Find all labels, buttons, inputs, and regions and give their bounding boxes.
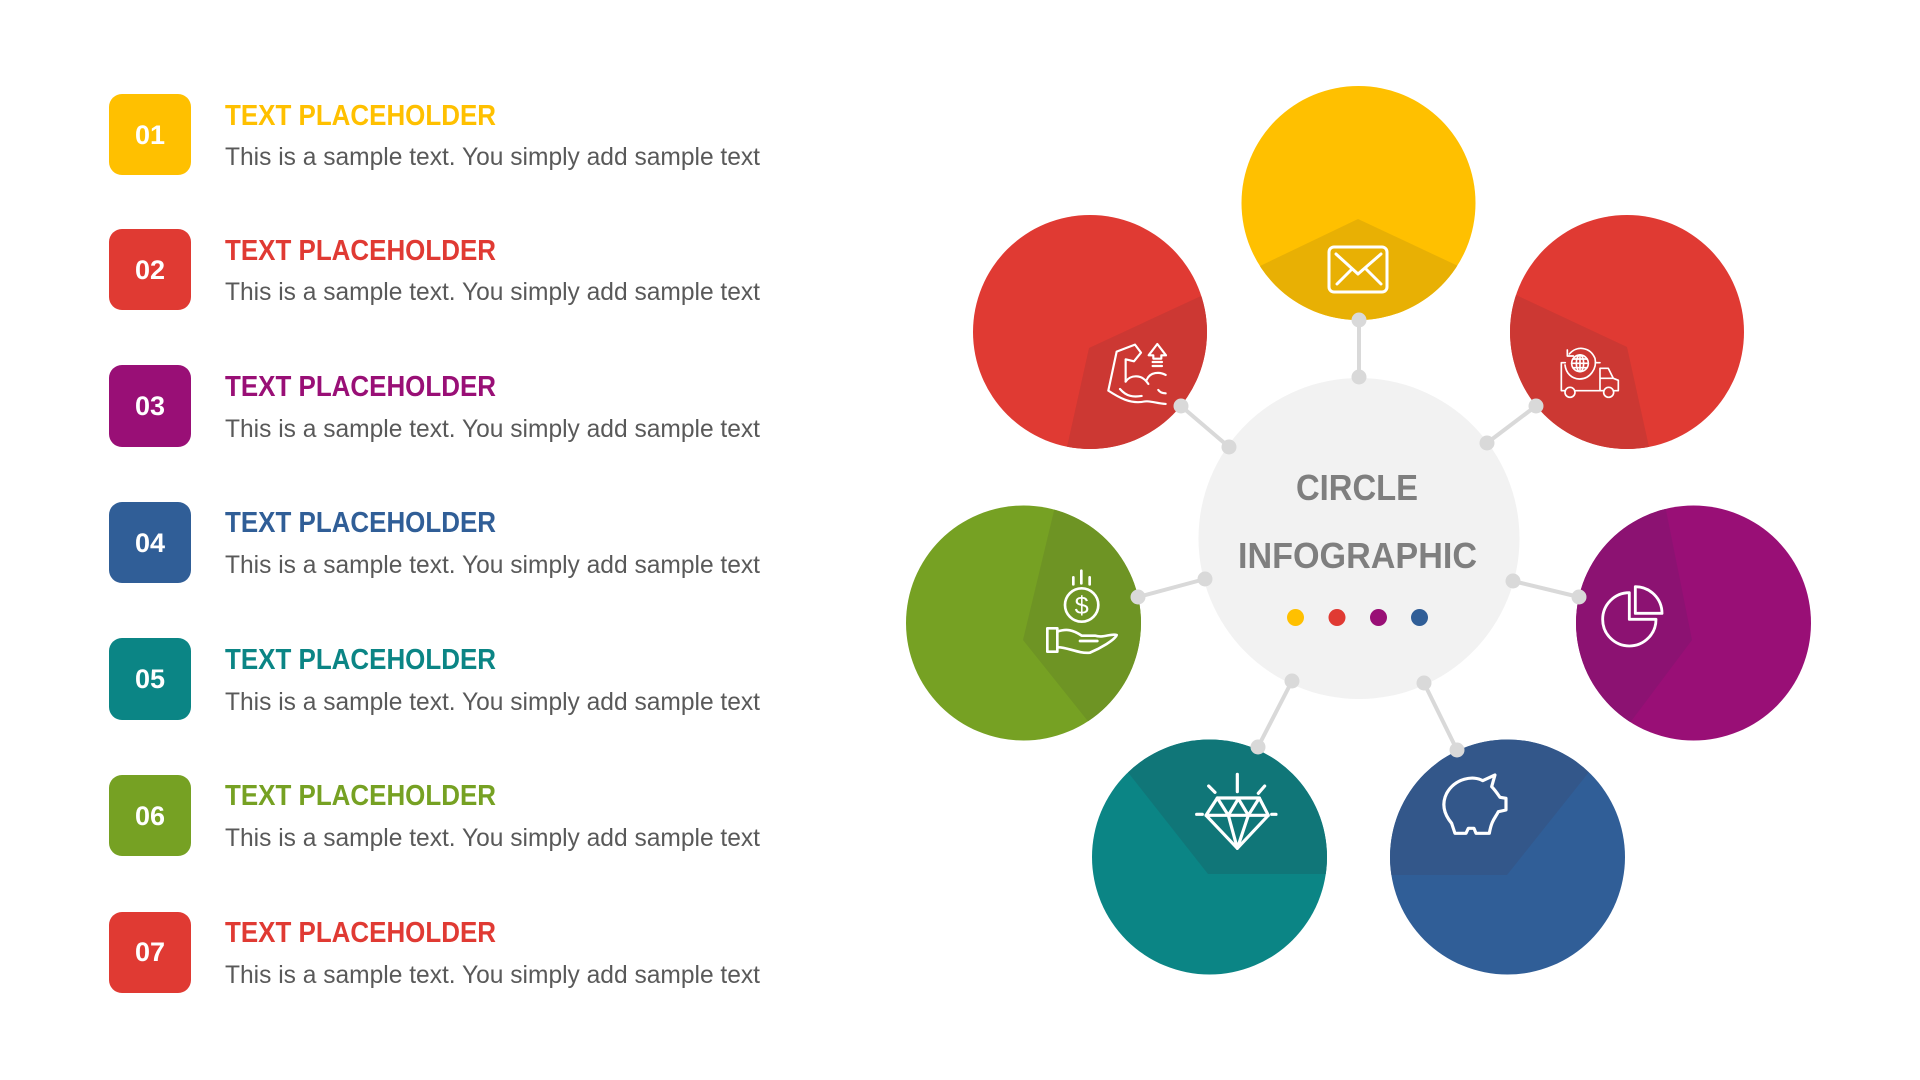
list item 03: 03 [135, 391, 165, 421]
title: INFOGRAPHIC [1238, 535, 1477, 576]
list item 06: This is a sample text. You simply add sample text [225, 824, 760, 852]
list item 05: TEXT PLACEHOLDER [225, 644, 496, 676]
list item 05: 05 [135, 664, 165, 694]
circle: purple with pie chart [1576, 506, 1811, 740]
list item 01 [109, 94, 760, 175]
list item 06: 06 [135, 801, 165, 831]
list item 05: This is a sample text. You simply add sample text [225, 688, 760, 716]
list item 06 [109, 775, 760, 856]
panel: circle diagram [906, 86, 1811, 974]
title [1238, 467, 1477, 576]
panel: numbered list [109, 94, 760, 993]
list item 05 [109, 638, 760, 720]
list item 04: TEXT PLACEHOLDER [225, 507, 496, 539]
list item 04: 04 [135, 528, 165, 558]
circle: teal with diamond [1092, 740, 1327, 974]
list item 07 [109, 912, 760, 993]
icon: coin in hand [1047, 571, 1117, 653]
list item 02: This is a sample text. You simply add sample text [225, 278, 760, 306]
list item 02: 02 [135, 255, 165, 285]
list item 02: TEXT PLACEHOLDER [225, 235, 496, 267]
list item 04: This is a sample text. You simply add sample text [225, 551, 760, 579]
icon: flexed arm [1108, 344, 1166, 404]
title: CIRCLE [1296, 467, 1418, 508]
list item 03: This is a sample text. You simply add sample text [225, 415, 760, 443]
list item 04 [109, 502, 760, 583]
list item 01: 01 [135, 120, 165, 150]
circle: green with coin in hand [906, 506, 1141, 740]
icon: envelope [1329, 247, 1387, 292]
list item 07: TEXT PLACEHOLDER [225, 917, 496, 949]
circle: blue with piggy bank [1390, 740, 1625, 974]
icon: diamond [1197, 774, 1276, 848]
center circle [1198, 378, 1520, 699]
list item 03 [109, 365, 760, 447]
color dots [1287, 609, 1428, 626]
list item 01: TEXT PLACEHOLDER [225, 100, 496, 132]
icon: pie chart [1603, 587, 1662, 646]
circle: red with delivery truck [1510, 215, 1744, 449]
circle: red with muscle [973, 215, 1207, 449]
icon: delivery truck and globe [1561, 348, 1618, 397]
list item 02 [109, 229, 760, 310]
list item 07: 07 [135, 937, 165, 967]
list item 06: TEXT PLACEHOLDER [225, 780, 496, 812]
list item 01: This is a sample text. You simply add sample text [225, 143, 760, 171]
list item 03: TEXT PLACEHOLDER [225, 371, 496, 403]
list item 07: This is a sample text. You simply add sample text [225, 961, 760, 989]
circle: yellow with envelope [1242, 86, 1476, 320]
icon: coin in hand: $ [1075, 592, 1089, 620]
icon: piggy bank [1444, 775, 1506, 833]
connectors [1130, 312, 1586, 758]
